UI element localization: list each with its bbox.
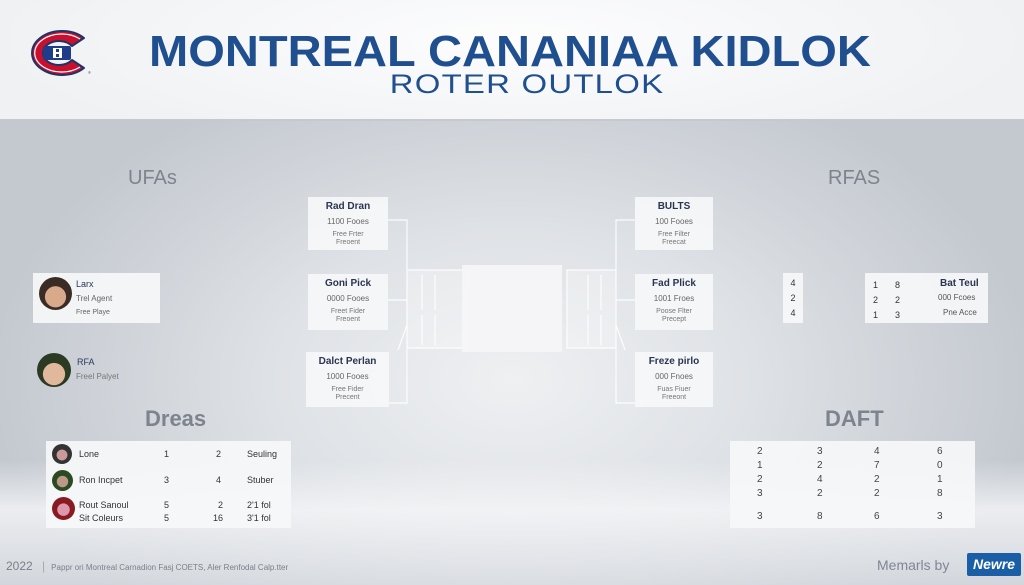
card: Larx player: Free Playe: [76, 309, 110, 316]
card: Rad Dran: 1100 Fooes: [327, 217, 369, 226]
table: left roster: 16: [213, 513, 223, 523]
card: Goni Pick: 0000 Fooes: [327, 294, 369, 303]
table: draft: 8: [937, 488, 943, 499]
small number column: 2: [790, 293, 796, 303]
table: left roster: Rout Sanoul: [79, 500, 129, 510]
card: Freze pirlo: Freeont: [662, 394, 686, 401]
card: Freze pirlo: Freze pirlo: [649, 356, 699, 367]
card: Larx player: [33, 273, 160, 323]
table: draft: 4: [874, 446, 880, 457]
table: draft: 2: [817, 488, 823, 499]
card: Bat Teul: 3: [895, 310, 900, 320]
card: Dalct Perlan: 1000 Fooes: [326, 372, 369, 381]
table: draft: 2: [757, 474, 763, 485]
card: BULTS: [635, 197, 713, 250]
table: left roster: 3: [164, 475, 169, 485]
card: BULTS: Free Filter: [658, 231, 690, 238]
subtitle: ROTER OUTLOK: [390, 69, 664, 99]
table: draft: 1: [757, 460, 763, 471]
table: left roster: Ron Incpet: [79, 475, 123, 485]
small number column: 4: [790, 308, 796, 318]
card: Rad Dran: Freoent: [336, 239, 360, 246]
table: draft: 7: [874, 460, 880, 471]
card: Rad Dran: [308, 197, 388, 250]
icon: avatar: [37, 353, 71, 387]
icon: team logo: ®: [88, 70, 91, 75]
card: Freze pirlo: 000 Fnoes: [655, 372, 693, 381]
table: draft: 3: [937, 511, 943, 522]
table: draft: 6: [937, 446, 943, 457]
table: left roster: 5: [164, 513, 169, 523]
table: draft: 3: [817, 446, 823, 457]
card: Bat Teul: 2: [873, 295, 878, 305]
card: Bat Teul: Pne Acce: [943, 308, 977, 317]
card: Bat Teul: Bat Teul: [940, 278, 979, 289]
card: Fad Plick: [635, 274, 713, 330]
icon: team logo: [31, 30, 91, 76]
icon: avatar: [39, 277, 72, 310]
table: left roster: Stuber: [247, 475, 274, 485]
card: Bat Teul: 2: [895, 295, 900, 305]
footer: source: 2022 | Pappr ori Montreal Carnadion Fasj COETS, Aler Renfodal Calp.tter: [6, 559, 288, 573]
heading: UFAs: UFAs: [128, 167, 177, 189]
small number column: 4: [790, 278, 796, 288]
table: left roster: [46, 441, 291, 528]
card: Bat Teul: [865, 273, 988, 323]
table: draft: 1: [937, 474, 943, 485]
table: draft: 3: [757, 488, 763, 499]
card: Dalct Perlan: Free Fider: [331, 386, 364, 393]
table: draft: 4: [817, 474, 823, 485]
card: BULTS: 100 Fooes: [655, 217, 693, 226]
bracket connectors: [388, 220, 635, 404]
table: draft: 2: [874, 474, 880, 485]
table: left roster: Sit Coleurs: [79, 513, 123, 523]
card: Dalct Perlan: Precent: [335, 394, 360, 401]
table: draft: 2: [874, 488, 880, 499]
card: Bat Teul: 1: [873, 310, 878, 320]
card: Goni Pick: [308, 274, 388, 330]
card: RFA player: RFA: [77, 357, 95, 367]
heading: RFAS: RFAS: [828, 167, 880, 189]
table: draft: 6: [874, 511, 880, 522]
card: Goni Pick: Freoent: [336, 316, 360, 323]
card: Goni Pick: Freet Fider: [331, 308, 365, 315]
table: left roster: 4: [216, 475, 221, 485]
table: draft: 2: [757, 446, 763, 457]
table: left roster: Lone: [79, 449, 99, 459]
table: left roster: 2: [218, 500, 223, 510]
card: Dalct Perlan: [306, 352, 389, 407]
footer: credit: Memarls by: [877, 557, 949, 573]
table: draft: 0: [937, 460, 943, 471]
card: Bat Teul: 8: [895, 280, 900, 290]
card: BULTS: BULTS: [658, 201, 690, 212]
card: Rad Dran: Rad Dran: [326, 201, 370, 212]
card: RFA player: [37, 353, 119, 387]
card: BULTS: Freecat: [662, 239, 686, 246]
card: Freze pirlo: Fuas Fiuer: [657, 386, 691, 393]
title: MONTREAL CANANIAA KIDLOK: [149, 27, 871, 76]
card: Bat Teul: 1: [873, 280, 878, 290]
heading: DAFT: DAFT: [825, 406, 884, 431]
table: left roster: 3'1 fol: [247, 513, 271, 523]
heading: Dreas: Dreas: [145, 406, 206, 431]
badge: Newre: [967, 553, 1021, 576]
card: Bat Teul: 000 Fcoes: [938, 293, 975, 302]
footer: credit: [877, 553, 1021, 576]
card: Fad Plick: Poose Flter: [656, 308, 692, 315]
table: draft: 8: [817, 511, 823, 522]
table: draft: [730, 441, 975, 528]
card: Fad Plick: Precept: [662, 316, 686, 323]
badge: Newre: Newre: [973, 556, 1015, 572]
table: left roster: Seuling: [247, 449, 277, 459]
table: left roster: 2: [216, 449, 221, 459]
card: RFA player: Freel Palyet: [76, 372, 119, 381]
card: Fad Plick: 1001 Froes: [654, 294, 694, 303]
card: Larx player: Larx: [76, 279, 94, 289]
card: Freze pirlo: [635, 352, 713, 407]
table: left roster: 2'1 fol: [247, 500, 271, 510]
card: Dalct Perlan: Dalct Perlan: [319, 356, 376, 367]
center box: [462, 265, 562, 352]
header: [0, 0, 1024, 121]
card: Larx player: Trel Agent: [76, 294, 112, 303]
table: left roster: 5: [164, 500, 169, 510]
table: draft: 2: [817, 460, 823, 471]
card: Goni Pick: Goni Pick: [325, 278, 371, 289]
card: Fad Plick: Fad Plick: [652, 278, 696, 289]
card: Rad Dran: Free Frter: [332, 231, 364, 238]
small number column: [783, 273, 803, 323]
table: left roster: 1: [164, 449, 169, 459]
table: draft: 3: [757, 511, 763, 522]
